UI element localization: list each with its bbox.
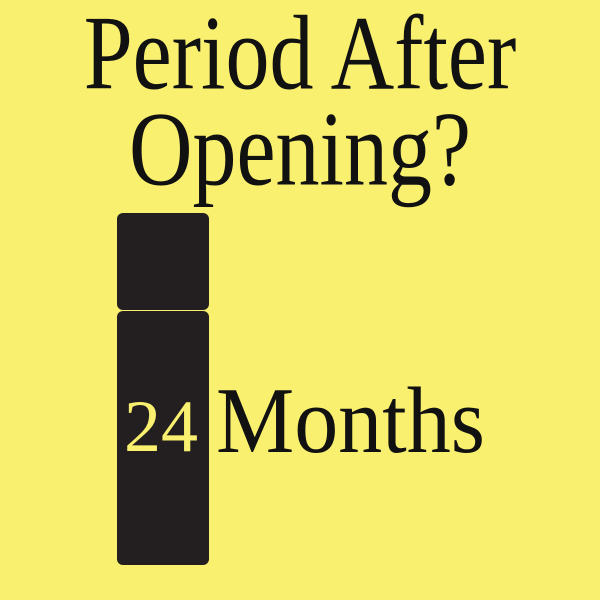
title line 2: Opening? <box>129 92 471 208</box>
number 24: 24 <box>124 386 198 468</box>
label months: Months <box>216 370 485 473</box>
title <box>84 0 516 208</box>
